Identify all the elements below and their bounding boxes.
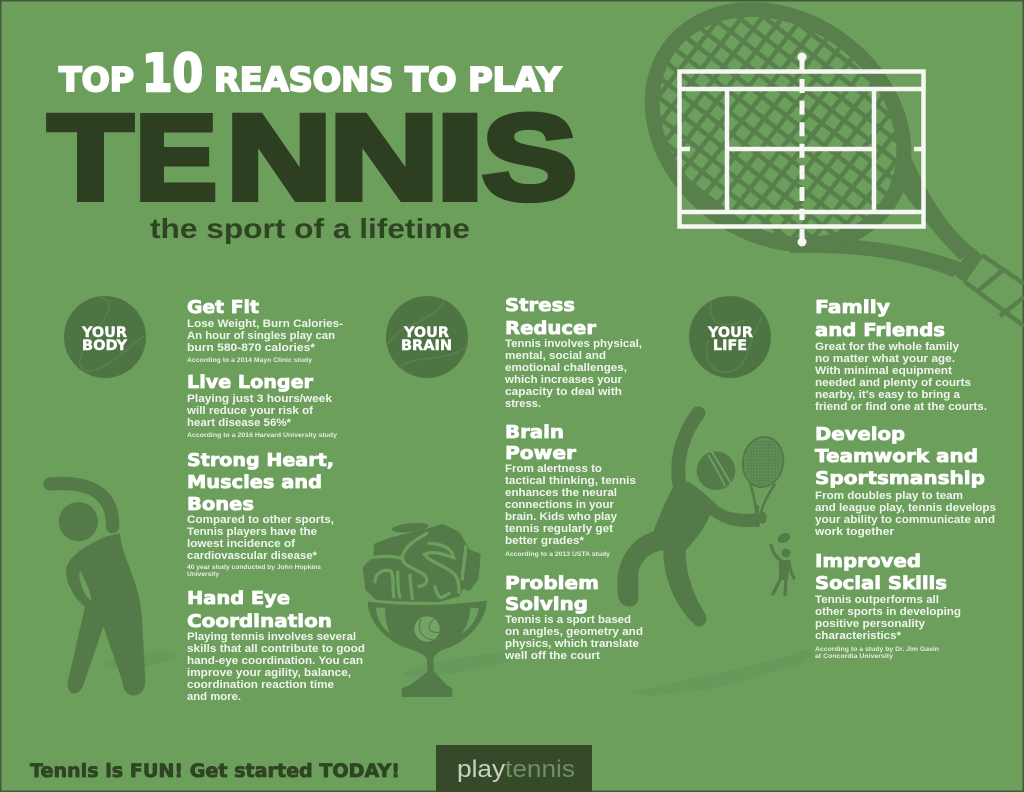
logo: playtennis: playtennis: [457, 756, 575, 783]
title word: tennis: E: [135, 89, 217, 225]
reason: family and friends: With minimal equipment: [815, 365, 952, 377]
reason: hand eye coordination: Playing tennis involves several: [187, 631, 356, 643]
reason: stress reducer: Tennis involves physical,: [505, 338, 642, 350]
reason: family and friends: Great for the whole family: [815, 341, 960, 353]
reason: strong heart: lowest incidence of: [187, 538, 295, 550]
reason: develop teamwork: and league play, tennis develops: [815, 502, 996, 514]
reason: family and friends: [815, 297, 987, 413]
reason: strong heart: 40 year study conducted by John Hopkins: [187, 564, 322, 571]
reason: hand eye coordination: Hand Eye: [187, 588, 290, 609]
reason: stress reducer: Reducer: [505, 318, 596, 339]
title line: top 10 reasons to play: 10: [142, 44, 203, 104]
badge: your brain: [386, 296, 468, 378]
reason: stress reducer: Stress: [505, 295, 575, 316]
logo: playtennis: [436, 745, 592, 792]
panel: your life: [617, 296, 996, 660]
title word: tennis: N: [329, 89, 439, 225]
reason: hand eye coordination: [187, 588, 365, 703]
title word: tennis: [48, 89, 577, 225]
reason: stress reducer: emotional challenges,: [505, 362, 627, 374]
reason: live longer: Playing just 3 hours/week: [187, 393, 333, 405]
badge: your brain: BRAIN: [401, 338, 452, 354]
reason: family and friends: Family: [815, 297, 890, 318]
reason: brain power: connections in your: [505, 499, 615, 511]
title word: tennis: N: [226, 89, 332, 225]
reason: hand eye coordination: hand-eye coordination. You can: [187, 655, 363, 667]
reason: family and friends: nearby, it's easy to bring a: [815, 389, 961, 401]
reason: get fit: [187, 297, 343, 364]
reason: family and friends: and Friends: [815, 320, 945, 341]
reason: hand eye coordination: and more.: [187, 691, 241, 703]
reason: brain power: better grades*: [505, 535, 585, 547]
reason: hand eye coordination: Coordination: [187, 611, 332, 632]
reason: family and friends: needed and plenty of courts: [815, 377, 971, 389]
reason: strong heart: University: [187, 571, 220, 578]
reason: get fit: Lose Weight, Burn Calories-: [187, 318, 343, 330]
badge: your life: YOUR: [707, 325, 753, 341]
reason: family and friends: no matter what your age.: [815, 353, 955, 365]
reason: get fit: An hour of singles play can: [187, 330, 335, 342]
reason: family and friends: friend or find one at the courts.: [815, 401, 987, 413]
reason: improved social skills: [815, 551, 961, 660]
reason: stress reducer: mental, social and: [505, 350, 606, 362]
reason: live longer: Live Longer: [187, 372, 313, 393]
reason: improved social skills: at Concordia University: [815, 653, 894, 660]
reason: develop teamwork: [814, 424, 996, 538]
title: [48, 44, 577, 244]
reason: improved social skills: other sports in developing: [815, 606, 961, 618]
footer tagline: Tennis is FUN! Get started TODAY!: [30, 760, 400, 782]
reason: live longer: heart disease 56%*: [187, 417, 292, 429]
reason: brain power: Power: [505, 443, 576, 464]
reason: live longer: will reduce your risk of: [186, 405, 313, 417]
reason: brain power: enhances the neural: [505, 487, 617, 499]
reason: problem solving: Problem: [505, 573, 599, 594]
reason: get fit: Get Fit: [187, 297, 259, 318]
panel: your brain: [364, 295, 643, 697]
reason: strong heart: cardiovascular disease*: [187, 550, 318, 562]
reason: develop teamwork: From doubles play to team: [815, 490, 963, 502]
reason: develop teamwork: your ability to communicate and: [815, 514, 995, 526]
title word: tennis: T: [48, 89, 133, 225]
reason: problem solving: [504, 573, 643, 662]
title line: top 10 reasons to play: [59, 44, 562, 104]
reason: stress reducer: capacity to deal with: [505, 386, 622, 398]
reason: improved social skills: Improved: [815, 551, 921, 572]
icon: brain in trophy: [364, 521, 487, 697]
reason: improved social skills: Social Skills: [815, 573, 947, 594]
reason: hand eye coordination: coordination reaction time: [187, 679, 334, 691]
title line: top 10 reasons to play: TOP: [59, 60, 134, 99]
reason: strong heart: Strong Heart,: [187, 450, 334, 471]
reason: live longer: [186, 372, 338, 439]
badge: your life: LIFE: [713, 338, 747, 354]
reason: strong heart: Tennis players have the: [187, 526, 317, 538]
reason: hand eye coordination: skills that all contribute to good: [187, 643, 365, 655]
reason: hand eye coordination: improve your agility, balance,: [187, 667, 351, 679]
reason: brain power: From alertness to: [505, 463, 602, 475]
icon: tennis player: [617, 413, 790, 627]
reason: get fit: According to a 2014 Mayo Clinic study: [187, 357, 313, 364]
reason: develop teamwork: Sportsmanship: [815, 468, 985, 489]
reason: stress reducer: stress.: [505, 398, 541, 410]
badge: your body: [64, 296, 146, 378]
badge: your life: [689, 296, 771, 378]
reason: improved social skills: characteristics*: [815, 630, 902, 642]
icon: tennis court: [680, 52, 924, 246]
reason: problem solving: Tennis is a sport based: [505, 614, 631, 626]
reason: get fit: burn 580-870 calories*: [187, 342, 316, 354]
subtitle: the sport of a lifetime: [150, 213, 470, 244]
reason: brain power: tactical thinking, tennis: [505, 475, 636, 487]
icon: tennis racket: [644, 2, 1024, 328]
title word: tennis: I: [435, 89, 485, 225]
reason: improved social skills: According to a study by Dr. Jim Gavin: [815, 646, 939, 653]
reason: strong heart: Muscles and: [187, 472, 322, 493]
reason: improved social skills: positive personality: [815, 618, 926, 630]
title line: top 10 reasons to play: REASONS TO PLAY: [214, 60, 562, 99]
reason: brain power: [505, 422, 636, 558]
badge: your body: YOUR: [81, 325, 127, 341]
reason: strong heart: Compared to other sports,: [187, 514, 334, 526]
reason: develop teamwork: Teamwork and: [815, 446, 978, 467]
reason: stress reducer: [504, 295, 642, 410]
reason: brain power: tennis regularly get: [505, 523, 613, 535]
badge: your body: BODY: [82, 338, 128, 354]
reason: problem solving: Solving: [505, 594, 588, 615]
reason: develop teamwork: work together: [814, 526, 895, 538]
reason: problem solving: physics, which translate: [505, 638, 639, 650]
reason: brain power: According to a 2013 USTA study: [505, 551, 611, 558]
reason: brain power: Brain: [505, 422, 564, 443]
reason: develop teamwork: Develop: [815, 424, 905, 445]
icon: small player: [771, 531, 794, 595]
panel: your body: [50, 296, 365, 703]
reason: live longer: According to a 2016 Harvard University study: [187, 432, 338, 439]
reason: problem solving: well off the court: [504, 650, 600, 662]
reason: stress reducer: which increases your: [504, 374, 623, 386]
reason: problem solving: on angles, geometry and: [505, 626, 643, 638]
reason: improved social skills: Tennis outperforms all: [815, 594, 939, 606]
reason: strong heart: [187, 450, 334, 578]
shadow: figure shadows: [101, 648, 812, 696]
title word: tennis: S: [482, 89, 577, 225]
badge: your brain: YOUR: [403, 325, 449, 341]
icon: stretching figure: [50, 484, 145, 695]
reason: strong heart: Bones: [187, 494, 254, 515]
reason: brain power: brain. Kids who play: [505, 511, 618, 523]
